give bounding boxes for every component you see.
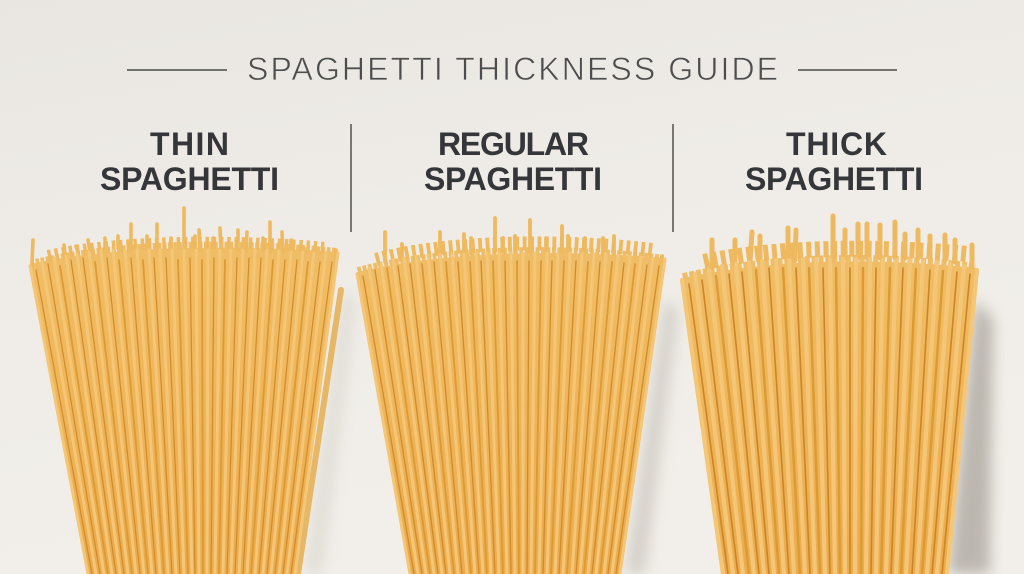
heading: thick spaghetti bbox=[745, 126, 923, 197]
column divider left bbox=[350, 124, 352, 232]
heading: thin spaghetti: THIN bbox=[150, 126, 229, 162]
column divider right bbox=[672, 124, 674, 232]
bundle: regular spaghetti bbox=[357, 218, 678, 574]
heading: thick spaghetti: THICK bbox=[786, 126, 887, 162]
heading: thick spaghetti: SPAGHETTI bbox=[745, 161, 923, 197]
heading: regular spaghetti: SPAGHETTI bbox=[424, 161, 602, 197]
bundle: thick spaghetti bbox=[682, 216, 993, 574]
heading: regular spaghetti bbox=[424, 126, 602, 197]
heading: regular spaghetti: REGULAR bbox=[438, 126, 589, 162]
heading: thin spaghetti bbox=[100, 126, 279, 197]
bundle: thin spaghetti bbox=[30, 208, 355, 574]
title: SPAGHETTI THICKNESS GUIDE bbox=[247, 51, 778, 87]
heading: thin spaghetti: SPAGHETTI bbox=[100, 161, 279, 197]
